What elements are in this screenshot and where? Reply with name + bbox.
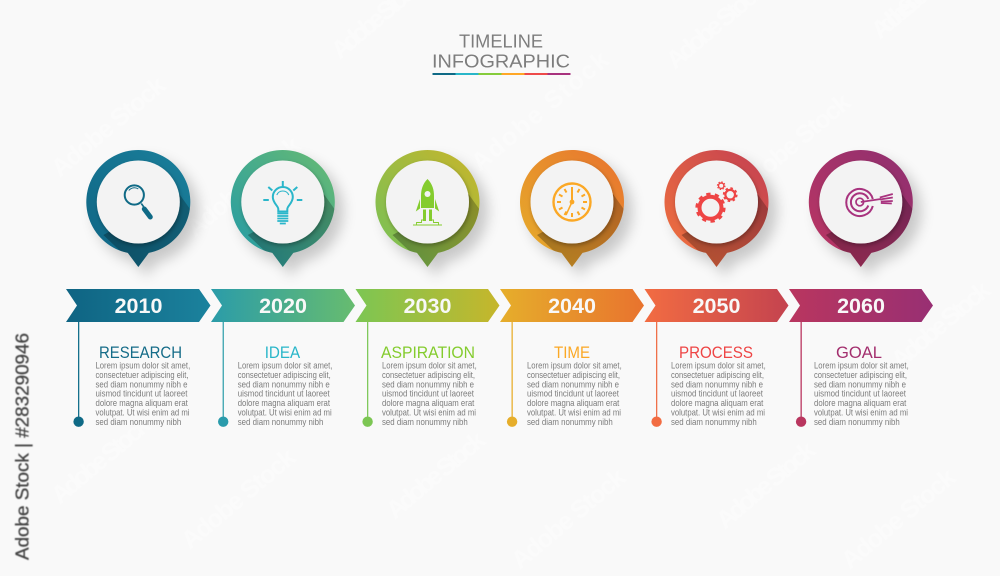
text block: process: uismod tincidunt ut laoreet bbox=[671, 389, 763, 399]
text block: research: Lorem ipsum dolor sit amet, bbox=[96, 360, 190, 370]
watermark pattern: Adobe Stock bbox=[886, 276, 996, 375]
leader line: research bbox=[73, 322, 84, 427]
text block: process bbox=[671, 360, 766, 427]
text block: aspiration: sed diam nonummy nibh e bbox=[382, 379, 474, 389]
watermark pattern: Adobe Stock bbox=[506, 463, 631, 575]
icon: target and arrow bbox=[846, 189, 893, 216]
title: INFOGRAPHIC bbox=[432, 51, 570, 72]
text block: goal: sed diam nonummy nibh e bbox=[814, 379, 906, 389]
watermark pattern: Adobe Stock bbox=[46, 411, 156, 510]
pin: 2020 idea bbox=[230, 150, 349, 277]
heading: goal: GOAL bbox=[836, 343, 882, 362]
text block: process: volutpat. Ut wisi enim ad mi bbox=[671, 408, 765, 418]
text block: time: dolore magna aliquam erat bbox=[527, 398, 620, 408]
watermark pattern: Adobe Stock bbox=[176, 443, 301, 555]
text block: time: sed diam nonummy nibh e bbox=[527, 379, 619, 389]
text block: aspiration: uismod tincidunt ut laoreet bbox=[382, 389, 474, 399]
watermark pattern: Adobe Stock bbox=[466, 46, 614, 177]
arrow: 2040 bbox=[500, 289, 644, 322]
text block: research bbox=[96, 360, 190, 427]
arrow: 2060 bbox=[789, 289, 933, 322]
watermark pattern: Adobe Stock bbox=[381, 426, 491, 525]
text block: goal bbox=[814, 360, 909, 427]
pin: 2060 goal bbox=[808, 150, 927, 277]
text block: idea: consectetuer adipiscing elit, bbox=[238, 370, 331, 380]
text block: time: sed diam nonummy nibh bbox=[527, 417, 613, 427]
text block: aspiration: Lorem ipsum dolor sit amet, bbox=[382, 360, 477, 370]
text block: time bbox=[527, 360, 622, 427]
text block: time: uismod tincidunt ut laoreet bbox=[527, 389, 619, 399]
text block: goal: consectetuer adipiscing elit, bbox=[814, 370, 907, 380]
text block: idea: dolore magna aliquam erat bbox=[238, 398, 330, 408]
pin: 2030 aspiration bbox=[376, 150, 494, 277]
text block: goal: uismod tincidunt ut laoreet bbox=[814, 389, 906, 399]
text block: process: dolore magna aliquam erat bbox=[671, 398, 764, 408]
text block: aspiration bbox=[382, 360, 477, 427]
leader line: aspiration bbox=[362, 322, 373, 427]
text block: research: dolore magna aliquam erat bbox=[96, 398, 188, 408]
arrow: 2010: 2010 bbox=[115, 294, 162, 318]
text block: goal: sed diam nonummy nibh bbox=[814, 417, 900, 427]
arrow: 2050: 2050 bbox=[693, 294, 740, 318]
icon: clock bbox=[554, 184, 590, 220]
text block: aspiration: volutpat. Ut wisi enim ad mi bbox=[382, 408, 476, 418]
text block: goal: dolore magna aliquam erat bbox=[814, 398, 907, 408]
heading: process: PROCESS bbox=[679, 343, 753, 362]
leader line: idea bbox=[218, 322, 228, 427]
title: TIMELINE bbox=[459, 31, 543, 52]
text block: time: consectetuer adipiscing elit, bbox=[527, 370, 620, 380]
text block: process: sed diam nonummy nibh e bbox=[671, 379, 763, 389]
watermark pattern: Adobe Stock bbox=[181, 131, 306, 243]
arrow: 2050 bbox=[644, 289, 788, 322]
heading: aspiration: ASPIRATION bbox=[381, 343, 475, 362]
text block: process: sed diam nonummy nibh bbox=[671, 417, 757, 427]
text block: idea: sed diam nonummy nibh e bbox=[238, 379, 330, 389]
text block: time: volutpat. Ut wisi enim ad mi bbox=[527, 408, 621, 418]
text block: idea: sed diam nonummy nibh bbox=[238, 417, 323, 427]
pin: 2050 process bbox=[664, 150, 782, 277]
text block: time: Lorem ipsum dolor sit amet, bbox=[527, 360, 622, 370]
icon: magnifying glass bbox=[125, 185, 150, 217]
leader line: goal bbox=[796, 322, 806, 427]
text block: research: volutpat. Ut wisi enim ad mi bbox=[96, 408, 190, 418]
text block: research: uismod tincidunt ut laoreet bbox=[96, 389, 188, 399]
text block: research: sed diam nonummy nibh bbox=[96, 417, 181, 427]
pin: 2040 time bbox=[520, 150, 638, 277]
arrow: 2020: 2020 bbox=[259, 294, 307, 318]
text block: idea: volutpat. Ut wisi enim ad mi bbox=[238, 408, 332, 418]
title bbox=[432, 31, 570, 75]
arrow: 2010 bbox=[66, 289, 210, 322]
text block: aspiration: dolore magna aliquam erat bbox=[382, 398, 475, 408]
stock image credit: Adobe Stock | #283290946 bbox=[12, 333, 32, 560]
arrow: 2030: 2030 bbox=[404, 294, 451, 318]
leader line: process bbox=[651, 322, 662, 427]
icon: gears bbox=[697, 182, 737, 221]
text block: research: consectetuer adipiscing elit, bbox=[96, 370, 188, 380]
watermark pattern: Adobe Stock bbox=[711, 436, 821, 535]
watermark pattern: Adobe Stock bbox=[46, 71, 171, 183]
text block: research: sed diam nonummy nibh e bbox=[96, 379, 188, 389]
text block: aspiration: consectetuer adipiscing elit, bbox=[382, 370, 475, 380]
text block: idea: uismod tincidunt ut laoreet bbox=[238, 389, 330, 399]
icon: light bulb bbox=[263, 181, 302, 224]
watermark pattern: Adobe Stock bbox=[836, 463, 961, 575]
arrow: 2040: 2040 bbox=[548, 294, 596, 318]
watermark pattern: Adobe Stock bbox=[731, 88, 856, 200]
leader line: time bbox=[507, 322, 517, 427]
heading: time: TIME bbox=[554, 343, 590, 362]
text block: idea bbox=[238, 360, 332, 427]
heading: research: RESEARCH bbox=[99, 343, 182, 362]
text block: aspiration: sed diam nonummy nibh bbox=[382, 417, 468, 427]
text block: idea: Lorem ipsum dolor sit amet, bbox=[238, 360, 332, 370]
arrow: 2020 bbox=[211, 289, 355, 322]
heading: idea: IDEA bbox=[265, 343, 301, 362]
text block: process: Lorem ipsum dolor sit amet, bbox=[671, 360, 766, 370]
text block: goal: Lorem ipsum dolor sit amet, bbox=[814, 360, 909, 370]
pin: 2010 research bbox=[86, 150, 204, 277]
arrow: 2030 bbox=[356, 289, 500, 322]
icon: rocket bbox=[413, 179, 442, 225]
text block: process: consectetuer adipiscing elit, bbox=[671, 370, 764, 380]
arrow: 2060: 2060 bbox=[837, 294, 885, 318]
text block: goal: volutpat. Ut wisi enim ad mi bbox=[814, 408, 908, 418]
